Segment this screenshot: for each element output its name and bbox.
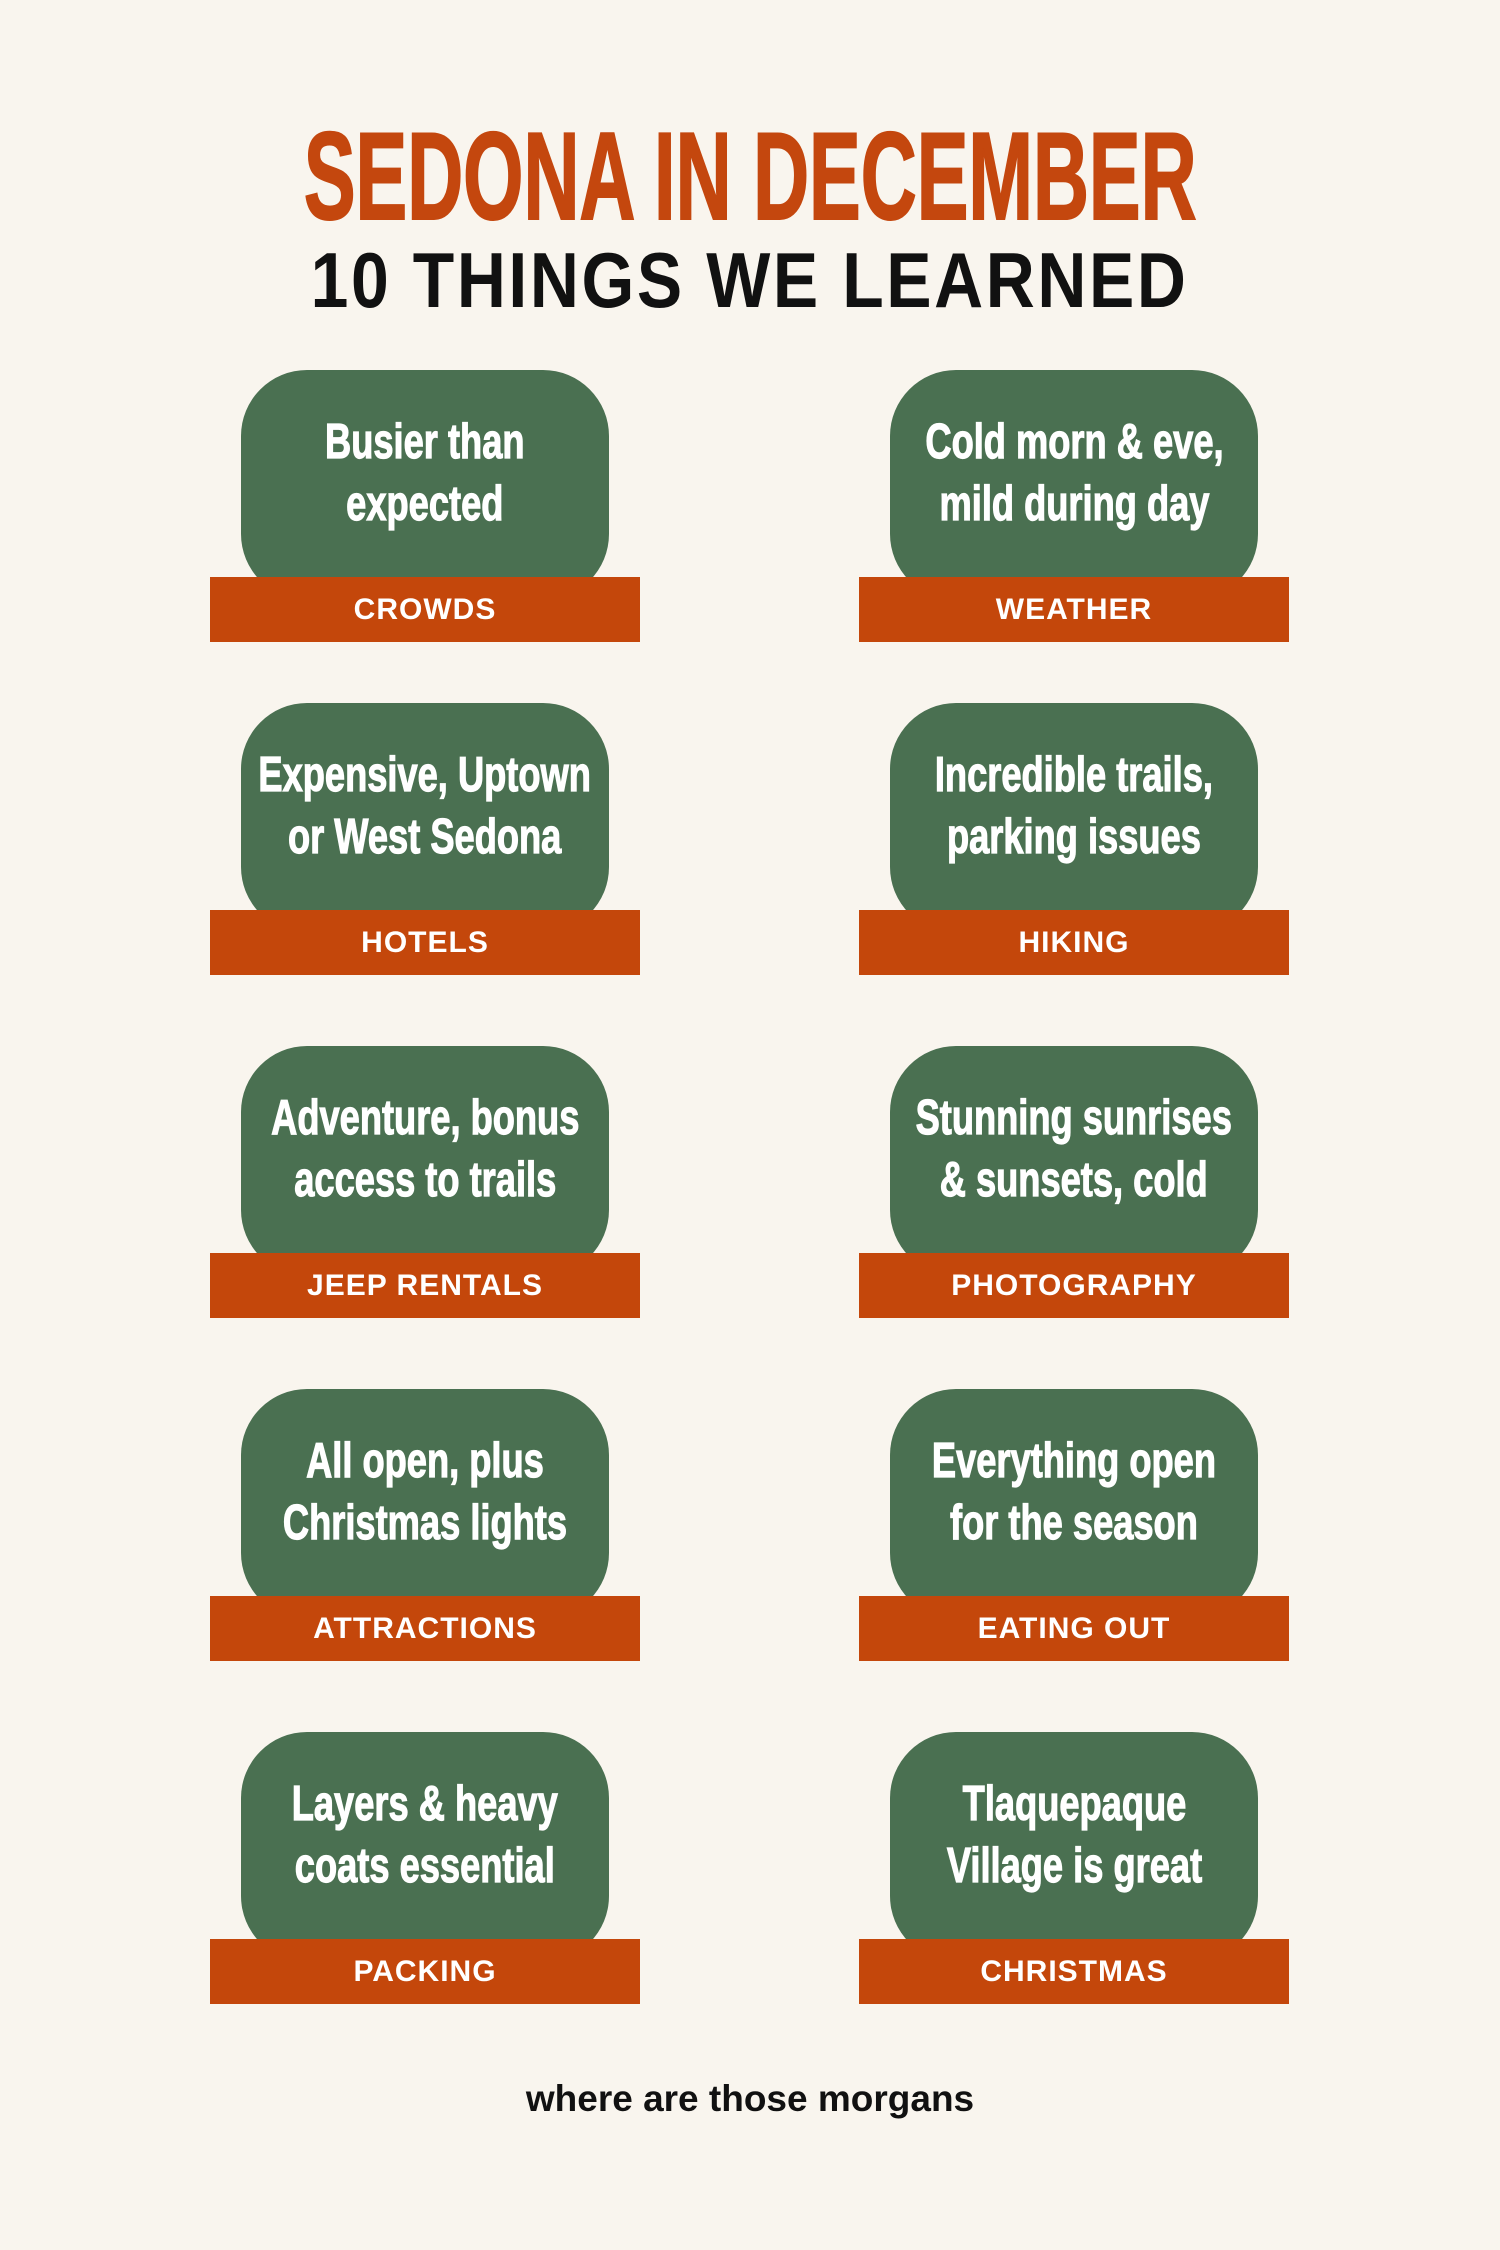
- card: crowds: expected: [346, 477, 504, 531]
- card: christmas: Tlaquepaque: [962, 1777, 1186, 1831]
- card: jeep rentals: JEEP RENTALS: [307, 1268, 543, 1302]
- card: hiking: parking issues: [947, 810, 1201, 864]
- card: hotels: or West Sedona: [288, 810, 562, 864]
- card: crowds: Busier than: [325, 415, 525, 469]
- card: photography: & sunsets, cold: [940, 1153, 1208, 1207]
- card: weather: [859, 370, 1289, 642]
- card: packing: [210, 1732, 640, 2004]
- card: packing: coats essential: [295, 1839, 555, 1893]
- card: attractions: Christmas lights: [283, 1496, 567, 1550]
- card: hiking: [859, 703, 1289, 975]
- card: weather: WEATHER: [996, 592, 1152, 626]
- card: christmas: [859, 1732, 1289, 2004]
- card: jeep rentals: Adventure, bonus: [271, 1091, 579, 1145]
- card: photography: Stunning sunrises: [916, 1091, 1232, 1145]
- title: SEDONA IN DECEMBER: [304, 108, 1196, 246]
- footer: where are those morgans: [526, 2078, 974, 2119]
- card: packing: Layers & heavy: [292, 1777, 558, 1831]
- card: weather: Cold morn & eve,: [925, 415, 1223, 469]
- card: eating out: Everything open: [932, 1434, 1216, 1488]
- card: christmas: CHRISTMAS: [980, 1954, 1168, 1988]
- card: packing: PACKING: [353, 1954, 497, 1988]
- card: eating out: [859, 1389, 1289, 1661]
- card: crowds: CROWDS: [354, 592, 496, 626]
- card: photography: PHOTOGRAPHY: [951, 1268, 1197, 1302]
- card: christmas: Village is great: [946, 1839, 1202, 1893]
- card: eating out: for the season: [950, 1496, 1198, 1550]
- card: hiking: HIKING: [1018, 926, 1130, 958]
- card: jeep rentals: access to trails: [294, 1153, 556, 1207]
- card: photography: [859, 1046, 1289, 1318]
- card: crowds: [210, 370, 640, 642]
- subtitle: 10 THINGS WE LEARNED: [311, 236, 1189, 324]
- card: hotels: Expensive, Uptown: [259, 748, 591, 802]
- card: weather: mild during day: [939, 477, 1209, 531]
- card: attractions: [210, 1389, 640, 1661]
- card: attractions: All open, plus: [306, 1434, 544, 1488]
- card: hotels: HOTELS: [361, 926, 489, 958]
- card: jeep rentals: [210, 1046, 640, 1318]
- card: hotels: [210, 703, 640, 975]
- card: attractions: ATTRACTIONS: [313, 1612, 537, 1644]
- card: eating out: EATING OUT: [978, 1612, 1170, 1644]
- card: hiking: Incredible trails,: [935, 748, 1213, 802]
